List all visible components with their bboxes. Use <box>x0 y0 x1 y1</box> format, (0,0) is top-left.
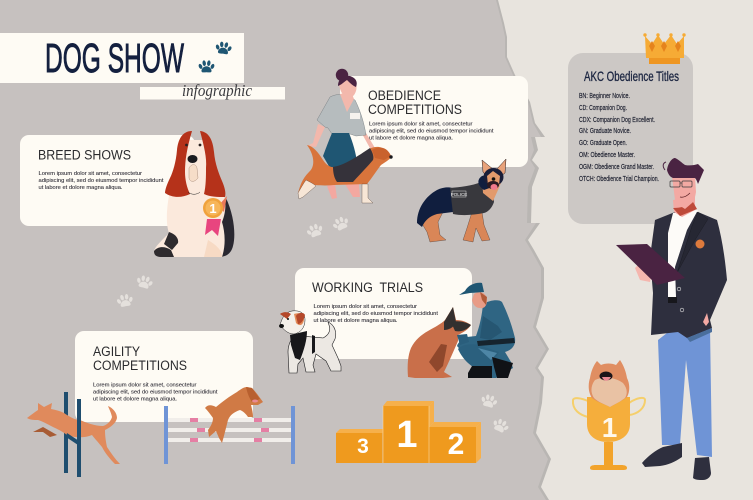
heading: obedience competitions <box>368 88 462 117</box>
illustration: trophy with pomeranian: 1 <box>602 412 617 443</box>
text: working body <box>314 304 438 324</box>
text: agility body: Lorem ipsum dolor sit amet, consectetur <box>93 382 197 388</box>
icon: crown <box>643 33 686 64</box>
podium place 2 <box>429 422 481 463</box>
neck and head <box>673 196 695 217</box>
jacket lapel and badge <box>677 212 708 273</box>
background: torn edge shadow <box>0 0 551 500</box>
list: titles: BN: Beginner Novice. <box>579 91 630 100</box>
panel: obedience competitions <box>340 76 528 167</box>
jacket <box>650 212 727 338</box>
title: DOG SHOW <box>45 35 184 81</box>
illustration: police dog <box>417 159 506 242</box>
illustration: basset hound with medal <box>154 131 234 257</box>
jeans <box>658 302 712 457</box>
subtitle band <box>140 87 285 100</box>
text: breed shows body: adipiscing elit, sed do eiusmod tempor incididunt <box>38 178 164 184</box>
illustration: judge man <box>616 158 727 480</box>
heading: breed shows: BREED SHOWS <box>38 148 131 162</box>
illustration: terrier dog <box>279 311 341 373</box>
subtitle: infographic <box>182 81 252 100</box>
text: agility body: ut labore et dolore magna aliqua. <box>93 396 177 402</box>
illustration: jumping dog over pole <box>27 392 120 477</box>
panel: akc obedience titles <box>568 53 693 224</box>
chart: winners podium <box>336 401 481 463</box>
list: titles <box>579 91 659 183</box>
text: working body: adipiscing elit, sed do eiusmod tempor incididunt <box>314 311 438 317</box>
shoes <box>642 443 711 480</box>
podium place 3: 3 <box>357 435 369 458</box>
text: obedience body: Lorem ipsum dolor sit amet, consectetur <box>369 122 473 128</box>
heading: akc titles: AKC Obedience Titles <box>584 68 679 84</box>
podium place 3 <box>336 429 383 463</box>
list: titles: CD: Companion Dog. <box>579 103 627 112</box>
heading: obedience competitions: COMPETITIONS <box>368 102 462 117</box>
background: left grey area <box>0 0 548 500</box>
title band <box>0 33 244 83</box>
text: obedience body: adipiscing elit, sed do eiusmod tempor incididunt <box>369 128 494 134</box>
illustration: trophy with pomeranian <box>573 360 645 470</box>
illustration: woman handler with beagle <box>298 69 393 203</box>
clipboard <box>616 244 685 285</box>
text: breed shows body: Lorem ipsum dolor sit amet, consectetur <box>38 171 142 177</box>
text: breed shows body: ut labore et dolore magna aliqua. <box>38 185 123 191</box>
podium place 1 <box>383 401 434 463</box>
illustration: hurdle with jumping dog <box>164 387 295 464</box>
panel: working trials <box>295 268 472 359</box>
list: titles: CDX: Companion Dog Excellent. <box>579 115 655 124</box>
podium place 1: 1 <box>396 414 418 456</box>
illustration: officer with german shepherd <box>408 283 515 378</box>
panel: breed shows <box>20 135 195 226</box>
text: obedience body: ut labore et dolore magna aliqua. <box>369 136 453 142</box>
text: working body: Lorem ipsum dolor sit amet, consectetur <box>314 304 417 310</box>
list: titles: OGM: Obedience Grand Master. <box>579 162 654 171</box>
heading: working trials: WORKING TRIALS <box>312 280 423 295</box>
list: titles: GN: Graduate Novice. <box>579 126 631 135</box>
illustration: basset hound with medal: 1 <box>209 201 217 216</box>
text: working body: ut labore et dolore magna aliqua. <box>314 318 398 324</box>
list: titles: GO: Graduate Open. <box>579 138 627 147</box>
heading: agility competitions: COMPETITIONS <box>93 358 187 373</box>
podium place 2: 2 <box>448 428 464 461</box>
list: titles: OTCH: Obedience Trial Champion. <box>579 174 659 183</box>
text: obedience body <box>369 122 494 142</box>
list: titles: OM: Obedience Master. <box>579 150 635 159</box>
heading: agility competitions: AGILITY <box>93 344 140 359</box>
text: breed shows body <box>38 171 164 191</box>
icon: title paws <box>198 41 233 72</box>
icon: light paw prints <box>115 214 511 435</box>
panel: agility competitions <box>75 331 253 422</box>
text: agility body <box>93 382 218 402</box>
illustration: police dog: POLICE <box>451 192 467 197</box>
hand <box>635 263 652 282</box>
shirt <box>668 210 698 297</box>
text: agility body: adipiscing elit, sed do eiusmod tempor incididunt <box>93 390 218 396</box>
heading: agility competitions <box>93 344 187 373</box>
heading: obedience competitions: OBEDIENCE <box>368 88 441 103</box>
